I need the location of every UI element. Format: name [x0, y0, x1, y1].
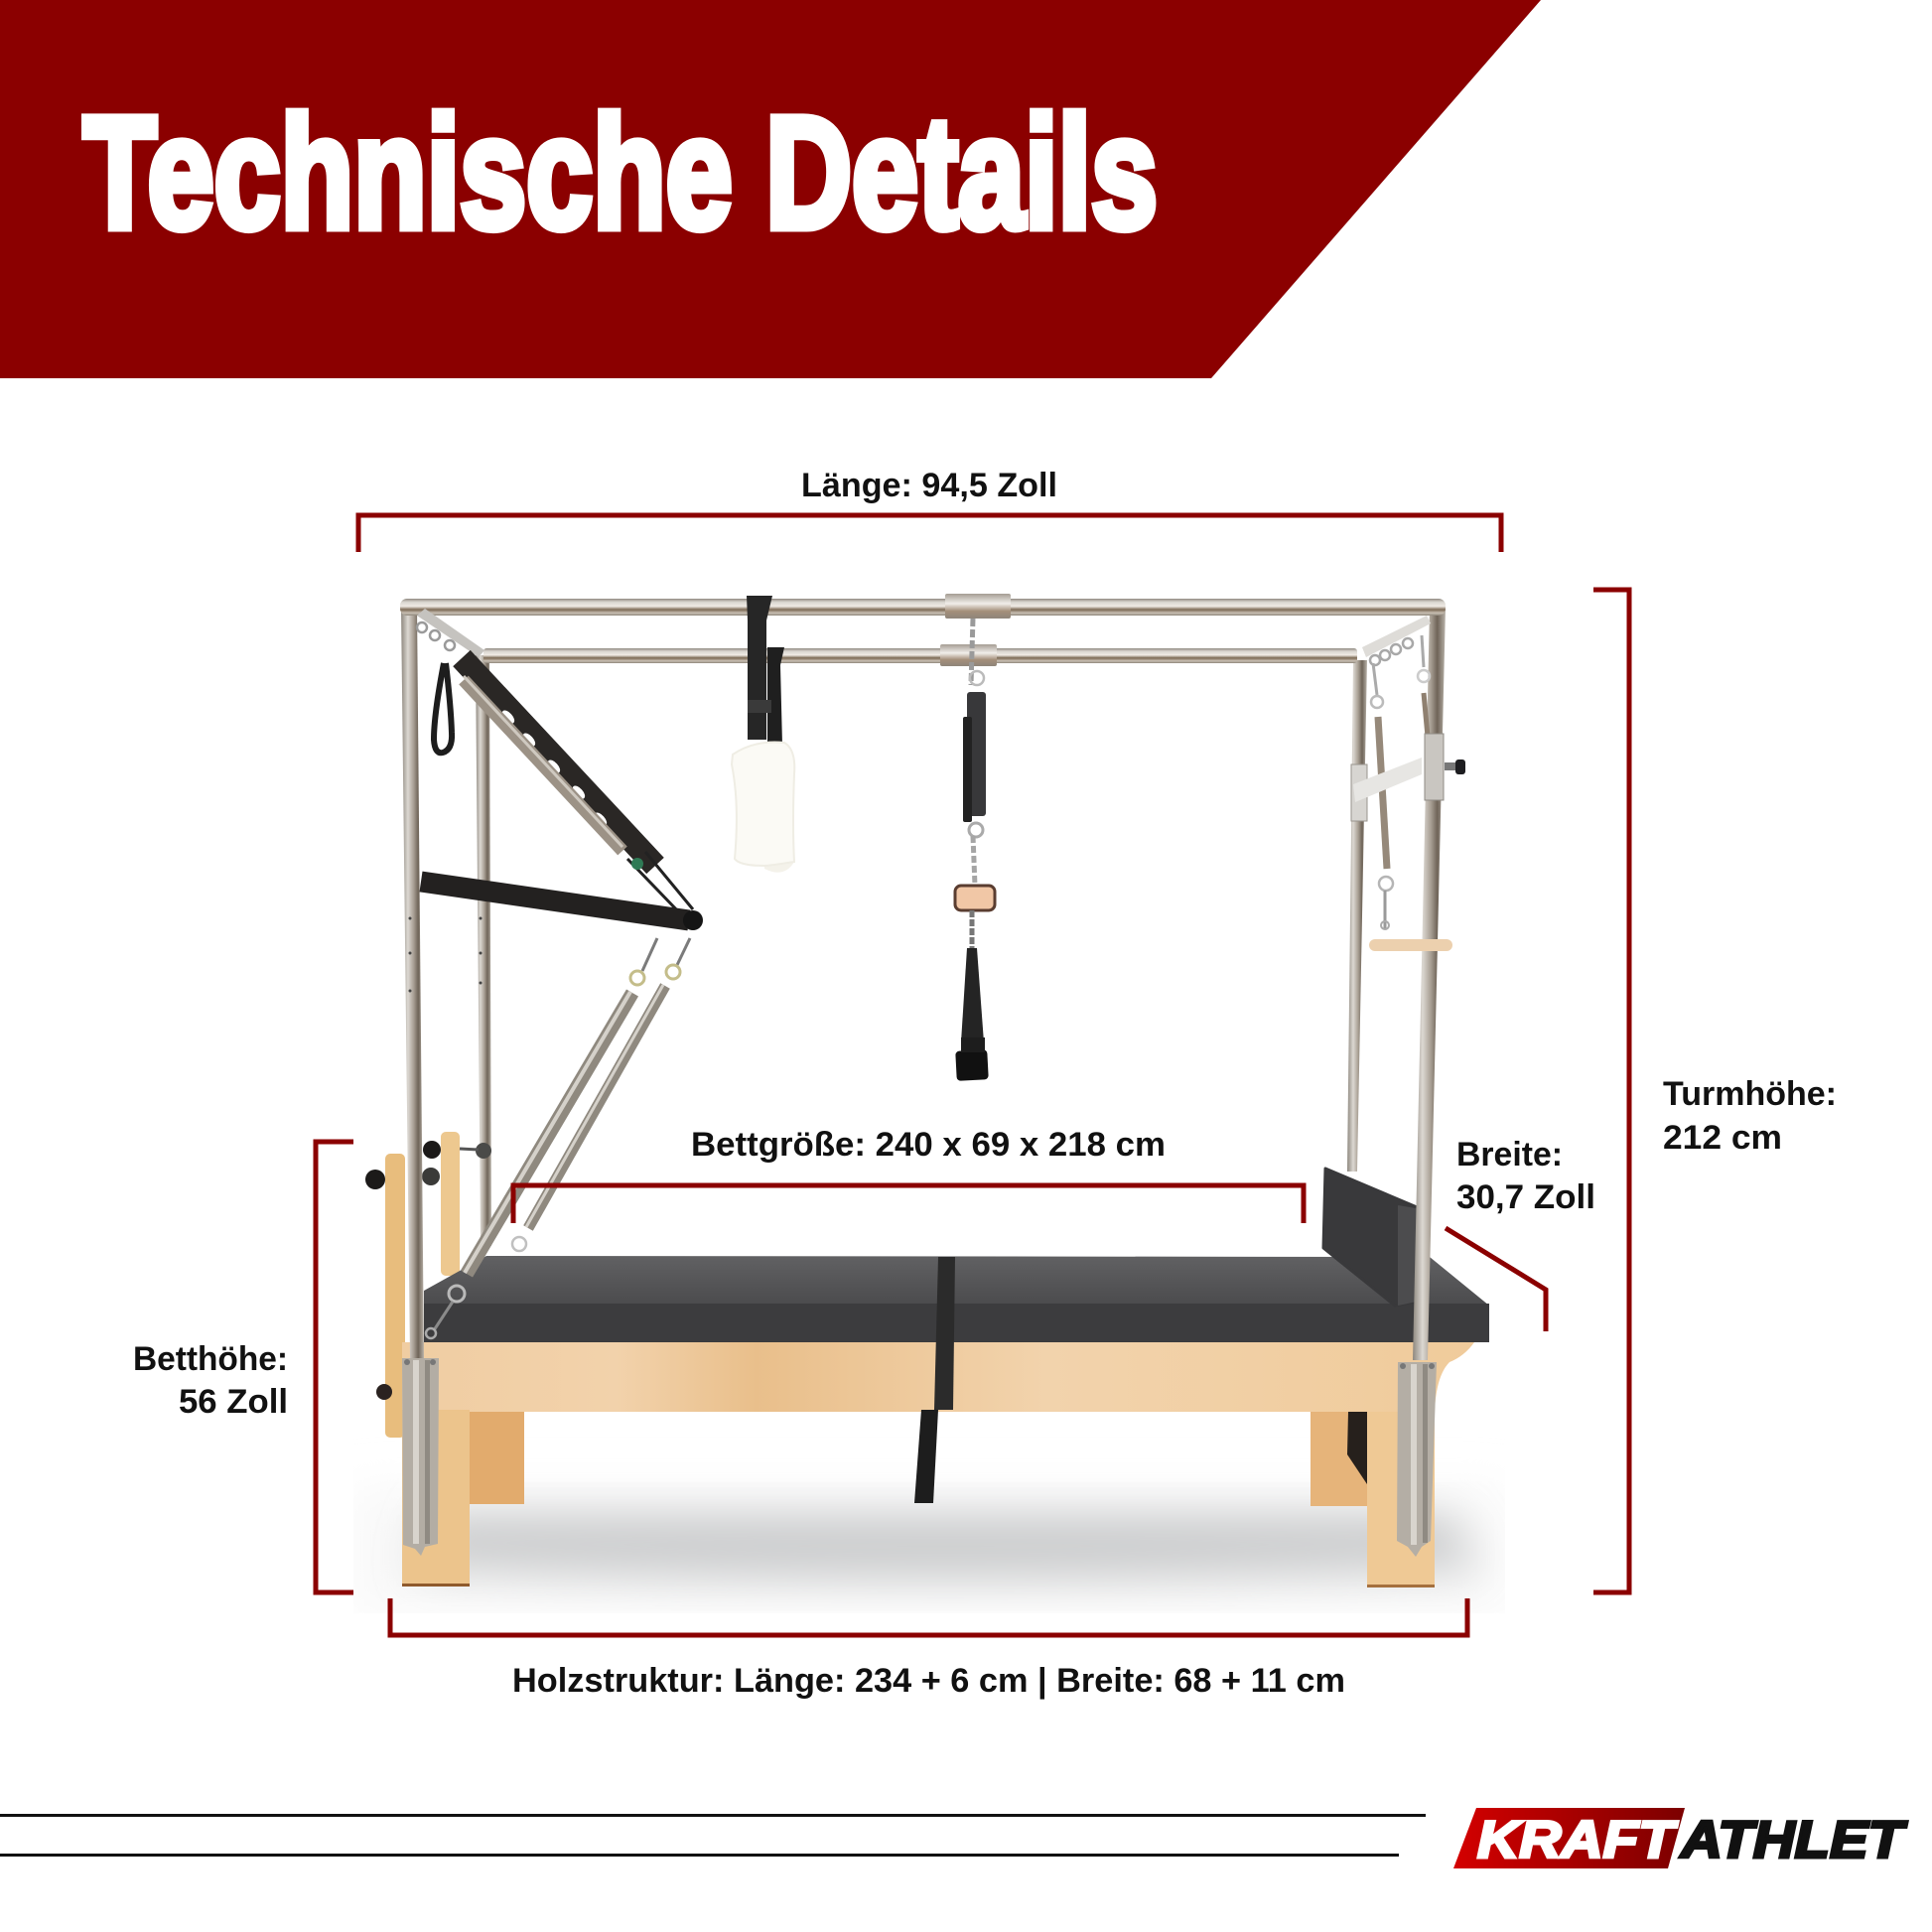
label: tower height: Turmhöhe: [1663, 1075, 1837, 1113]
centre strap [914, 1257, 955, 1503]
right hook bar and tower springs [1351, 616, 1465, 951]
title: Technische Details [83, 83, 1158, 261]
dimension: width bracket [1446, 1228, 1546, 1331]
hand loop [434, 663, 452, 753]
mattress [424, 1256, 1489, 1342]
dimension: bed height bracket [316, 1142, 353, 1592]
springs [426, 938, 690, 1338]
post holes [409, 917, 483, 993]
left wooden panels [365, 1132, 491, 1438]
logo [1453, 1808, 1908, 1869]
cadillac table [365, 594, 1489, 1587]
logo: KRAFT [1477, 1811, 1679, 1869]
logo: ATHLET [1679, 1811, 1908, 1869]
label: tower height: 212 cm [1663, 1119, 1782, 1157]
left hook bar [417, 609, 484, 657]
footer lines [0, 1814, 1426, 1857]
floor shadow [353, 1489, 1505, 1613]
dimension: wood structure bracket [390, 1598, 1467, 1635]
label: bed height: Betthöhe: [133, 1340, 288, 1378]
label: bed height [133, 1340, 288, 1421]
dimension: tower height bracket [1593, 590, 1629, 1592]
label: width [1456, 1136, 1595, 1216]
front posts [401, 608, 1446, 1360]
center sleeves [940, 594, 1011, 666]
label: length: Länge: 94,5 Zoll [801, 467, 1057, 504]
top frame [400, 599, 1446, 663]
dimension: length bracket [358, 515, 1501, 552]
label: width: 30,7 Zoll [1456, 1178, 1595, 1216]
label: bed size: Bettgröße: 240 x 69 x 218 cm [691, 1126, 1166, 1164]
push through bar [421, 658, 703, 930]
back posts [476, 655, 1367, 1246]
label: tower height [1663, 1075, 1837, 1157]
dimension: bed size bracket [513, 1185, 1304, 1223]
label: bed height: 56 Zoll [179, 1383, 288, 1421]
back legs [470, 1410, 1367, 1506]
back pad [1323, 1169, 1422, 1306]
label: wood structure: Holzstruktur: Länge: 234 + 6 cm | Breite: 68 + 11 cm [512, 1662, 1345, 1700]
hanging loop handle [955, 619, 995, 1081]
metal leg plates [402, 1358, 1437, 1557]
label: width: Breite: [1456, 1136, 1563, 1173]
strap with fleece [732, 596, 794, 873]
frame and front legs [402, 1342, 1474, 1587]
banner [0, 0, 1541, 378]
